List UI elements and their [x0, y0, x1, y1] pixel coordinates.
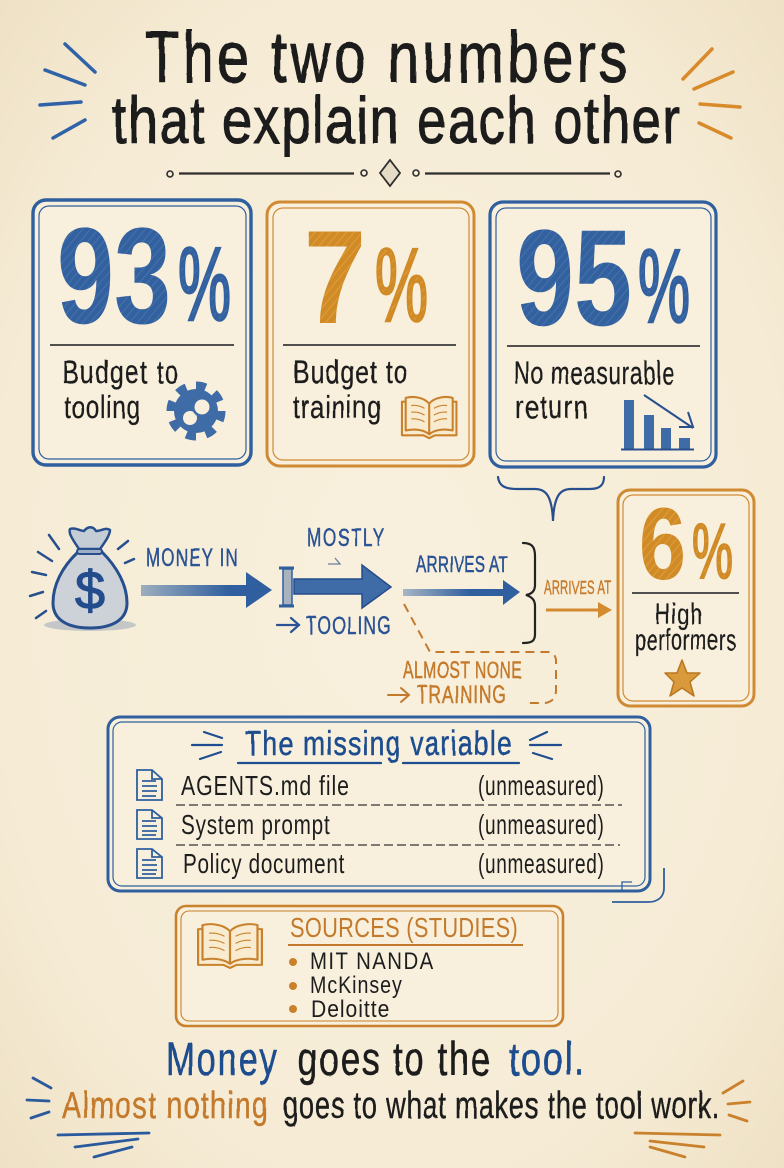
panel frame — [176, 906, 563, 1026]
row: system prompt — [137, 809, 604, 841]
arrow to tooling — [277, 618, 299, 632]
conclusion line 2 — [62, 1084, 719, 1127]
bracket — [523, 543, 535, 643]
label: Budget to — [293, 355, 408, 391]
icon: document — [137, 770, 162, 800]
label: arrives at, blue: ARRIVES AT — [416, 552, 508, 578]
label: performers — [635, 624, 736, 657]
row: agents file: (unmeasured) — [478, 770, 604, 802]
rule — [632, 592, 739, 594]
panel: sources — [176, 906, 563, 1026]
number 7% — [304, 204, 428, 352]
brace under 95% card — [498, 477, 604, 521]
card frame — [490, 202, 716, 467]
label: training — [293, 390, 381, 426]
conclusion line 1: Money — [166, 1033, 277, 1085]
label: tooling — [64, 390, 140, 426]
label: No measurable — [514, 355, 674, 391]
number 7%: 7 — [304, 204, 366, 352]
arrow: mostly tooling — [294, 565, 391, 608]
label: almost none: ALMOST NONE — [403, 658, 522, 684]
title: that explain each other — [112, 83, 680, 157]
row: agents file — [137, 770, 604, 802]
label — [293, 355, 408, 426]
number 6%: % — [692, 507, 733, 595]
number 6% — [639, 487, 733, 601]
source list: Deloitte — [311, 996, 389, 1022]
source list — [289, 947, 433, 1022]
number 6%: 6 — [639, 487, 686, 601]
card frame — [33, 200, 251, 465]
label: money in: MONEY IN — [146, 544, 238, 572]
row: system prompt: System prompt — [181, 810, 330, 841]
label: training: TRAINING — [417, 680, 506, 709]
row: agents file: AGENTS.md file — [181, 770, 349, 802]
heading: SOURCES (STUDIES) — [290, 912, 518, 944]
arrow: money in — [141, 572, 272, 608]
icon: document — [137, 849, 162, 878]
rule — [507, 345, 700, 347]
rule — [50, 344, 234, 346]
label — [62, 355, 178, 426]
label — [635, 599, 736, 657]
panel frame — [108, 717, 664, 902]
number 93%: % — [178, 227, 231, 343]
icon: valve bar — [279, 568, 294, 606]
icon: gear — [171, 386, 221, 436]
rule — [283, 344, 456, 346]
number 93%: 93 — [57, 200, 171, 353]
arrow to training — [388, 688, 409, 702]
card frame — [267, 202, 474, 466]
title divider — [167, 160, 621, 186]
source list: MIT NANDA — [310, 947, 433, 974]
dashed line: almost none to training — [404, 604, 556, 703]
card: 6% high performers — [618, 487, 754, 706]
card: 7% budget to training — [267, 202, 474, 466]
number 95%: % — [638, 229, 690, 345]
label: Budget to — [62, 355, 178, 391]
row: policy document — [137, 848, 604, 880]
label: tooling: TOOLING — [306, 611, 391, 640]
source list: McKinsey — [310, 971, 402, 998]
arrow: arrives at, blue — [403, 580, 520, 605]
icon: falling bar chart — [621, 395, 694, 450]
conclusion line 2: Almost nothing — [62, 1084, 268, 1127]
label: mostly: MOSTLY — [307, 524, 384, 552]
icon: open book — [198, 924, 262, 968]
conclusion line 1: goes to the — [298, 1032, 490, 1085]
conclusion line 1: tool. — [509, 1033, 585, 1085]
arrow: arrives at, orange — [546, 602, 612, 618]
card: 93% budget to tooling — [33, 200, 251, 465]
panel: the missing variable — [108, 717, 664, 902]
row: system prompt: (unmeasured) — [478, 809, 604, 841]
footer flourishes: orange — [635, 1081, 750, 1157]
title rays: blue — [40, 44, 95, 138]
number 7%: % — [375, 228, 428, 344]
label: mostly — [307, 524, 384, 564]
conclusion line 1 — [166, 1032, 585, 1085]
footer flourishes: blue — [27, 1078, 149, 1157]
label: return — [515, 390, 588, 426]
row: policy document: Policy document — [183, 849, 344, 880]
icon: open book — [402, 397, 456, 438]
card frame — [618, 490, 754, 706]
card: 95% no measurable return — [490, 202, 716, 467]
number 95%: 95 — [516, 202, 632, 355]
heading: The missing variable — [245, 725, 512, 763]
label: arrives at, orange: ARRIVES AT — [544, 578, 612, 599]
conclusion line 2: goes to what makes the tool work. — [283, 1085, 719, 1127]
small arrow — [328, 558, 340, 564]
icon: money bag — [30, 527, 136, 631]
icon: document — [137, 810, 162, 839]
icon: money bag: $ — [75, 561, 105, 621]
title: The two numbers — [145, 17, 627, 98]
title — [112, 17, 680, 157]
label — [514, 355, 674, 426]
icon: star — [665, 660, 700, 696]
title rays: orange — [683, 49, 740, 138]
row: policy document: (unmeasured) — [478, 848, 604, 880]
label: High — [655, 599, 702, 631]
